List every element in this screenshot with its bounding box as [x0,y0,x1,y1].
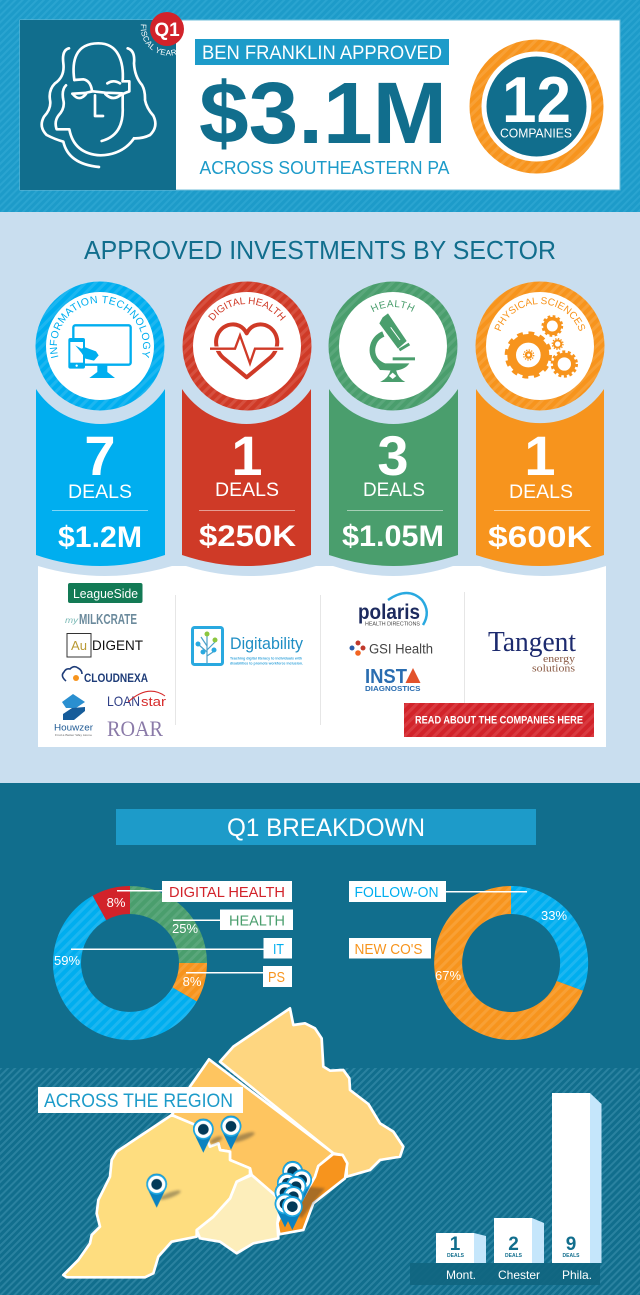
bar: Philadelphia: DEALS [563,1253,580,1259]
logo: Digitability: Teaching digital literacy to individuals with [230,656,302,660]
logo: Tangent Energy Solutions [488,626,576,674]
bar: Philadelphia [552,1093,602,1282]
donut chart: by sector: 8% [107,895,126,910]
logo: Cloudnexa: CLOUDNEXA [84,673,148,685]
portrait tile [20,20,176,190]
donut chart: by sector: 59% [54,953,80,968]
logo: Cloudnexa [62,667,148,685]
header band [0,0,640,212]
bar: Montgomery: DEALS [447,1253,465,1259]
bar: Montgomery: 1 [450,1234,461,1255]
logo: myMilkcrate: my [65,616,79,625]
logo: Polaris [358,593,427,628]
pin shadows [158,1130,325,1218]
logo: LeagueSide [68,583,142,603]
sector card: physical sciences [476,282,604,566]
sector card: health: 3 [377,424,409,487]
section banner: Q1 BREAKDOWN [227,814,425,842]
label: PS [186,966,292,987]
fiscal year caption: FISCAL YEAR [140,24,176,56]
logo: Digitability: Digitability [230,634,303,653]
label: IT [71,938,292,958]
sector card: physical sciences: $600K [488,521,592,554]
bar: Chester [494,1218,544,1282]
companies badge: 12 [502,63,571,136]
Q1 badge: Q1 [154,20,180,41]
label: health: HEALTH [229,912,285,930]
button: read about the companies: READ ABOUT THE COMPANIES HERE [415,714,583,726]
logo: Tangent Energy Solutions: solutions [532,664,575,674]
logo: Houwzer: Houwzer [54,722,93,734]
logo: Insta Diagnostics [365,666,420,693]
logo: Houwzer [54,694,93,737]
logo: Tangent Energy Solutions: Tangent [488,626,576,658]
panel: investments by sector [0,212,640,783]
label: follow-on: FOLLOW-ON [354,884,438,901]
sector card: digital health: DEALS [215,480,279,501]
companies badge: COMPANIES [500,126,572,140]
location pins [146,1116,312,1230]
county: Bucks [220,1008,403,1177]
sector card: information technology: 7 [84,424,116,487]
label: health [173,910,293,930]
logo: Houwzer: Find a Better Way Home [55,733,92,737]
panel: across the region [0,1008,640,1295]
region subhead: ACROSS SOUTHEASTERN PA [200,157,450,178]
sector card: digital health: $250K [199,520,296,553]
logo: Audigent [67,634,143,657]
sector card: digital health [182,282,312,566]
sector card: physical sciences: 1 [524,424,556,487]
county: Delaware [197,1175,280,1253]
bar: Chester: 2 [508,1234,519,1255]
companies badge [470,40,604,174]
logo: Digitability: disabilities to promote workforce inclusion. [230,662,303,666]
sector card: digital health: 1 [231,424,263,487]
logo: Audigent: Au [71,638,87,653]
logo: GSI Health: GSI Health [369,642,433,656]
county: Philadelphia [277,1154,347,1234]
bar: Montgomery [436,1233,486,1282]
donut chart: by sector: 8% [183,974,202,989]
deal card [182,389,311,566]
panel: company logos [38,566,606,747]
label: new companies: NEW CO'S [354,941,422,958]
icon: microscope [372,313,415,382]
sector card: information technology: DEALS [68,482,132,503]
donut chart: by sector: 25% [172,921,198,936]
logo: Loanstar: star [141,694,167,709]
label: digital health [117,881,292,902]
map of southeastern PA [63,1008,403,1277]
deal card [476,389,604,566]
sector label: HEALTH [370,300,415,312]
sector card: health: $1.05M [342,520,444,553]
label: IT: IT [273,941,284,958]
sector card: health [328,282,458,566]
bar chart: deals by county [410,1093,602,1285]
bar: Montgomery: Mont. [446,1268,476,1282]
Q1 badge [150,12,184,46]
bar: Philadelphia: 9 [566,1234,576,1255]
sector card: information technology: $1.2M [58,521,142,554]
sector label: DIGITAL HEALTH [208,297,286,321]
deal card [36,389,165,566]
logo: Digitability [192,628,303,666]
deal card [329,389,458,566]
header panel [20,20,620,190]
sector card: physical sciences: DEALS [509,482,573,503]
icon: monitor and phone [68,325,131,378]
sector card: health: DEALS [363,480,425,501]
heading banner: BEN FRANKLIN APPROVED [202,43,442,64]
sector label: PHYSICAL SCIENCES [494,297,586,332]
logo: Loanstar: LOAN [107,693,140,709]
icon: Ben Franklin portrait [42,43,155,167]
sector card: information technology [36,282,165,566]
logo: Polaris: HEALTH DIRECTIONS [365,622,421,628]
donut chart: follow-on vs new: 33% [541,908,567,923]
panel: Q1 breakdown [0,783,640,1068]
logo: Roar: ROAR [107,716,163,741]
logo: LeagueSide: LeagueSide [73,586,138,601]
icon: heart with pulse [210,324,283,377]
icon: gears [507,316,577,376]
county: Montgomery [172,1059,333,1207]
donut chart: follow-on vs new [434,886,588,1040]
label: follow-on [349,881,527,902]
logo: Insta Diagnostics: DIAGNOSTICS [365,684,420,693]
section banner [116,809,536,845]
bar: Chester: Chester [498,1268,540,1282]
donut chart: follow-on vs new: 67% [435,968,461,983]
logo: myMilkcrate [65,611,137,628]
logo: Loanstar [107,691,167,709]
logo: Polaris: polaris [358,601,420,624]
logo: Insta Diagnostics: INST [365,666,407,688]
total amount: $3.1M [199,65,447,162]
sector label: INFORMATION TECHNOLOGY [50,296,150,358]
donut chart: by sector [53,886,207,1040]
label: digital health: DIGITAL HEALTH [169,884,285,901]
bar: Chester: DEALS [505,1253,523,1259]
logo: Tangent Energy Solutions: energy [543,654,576,665]
section heading: APPROVED INVESTMENTS BY SECTOR [84,235,556,265]
region heading: ACROSS THE REGION [44,1091,233,1112]
button: read about the companies [404,703,594,737]
logo: myMilkcrate: MILKCRATE [79,611,137,628]
logo: Audigent: DIGENT [92,637,143,653]
county: Chester [63,1115,250,1277]
label: PS: PS [268,969,285,986]
bar: Philadelphia: Phila. [562,1268,592,1282]
